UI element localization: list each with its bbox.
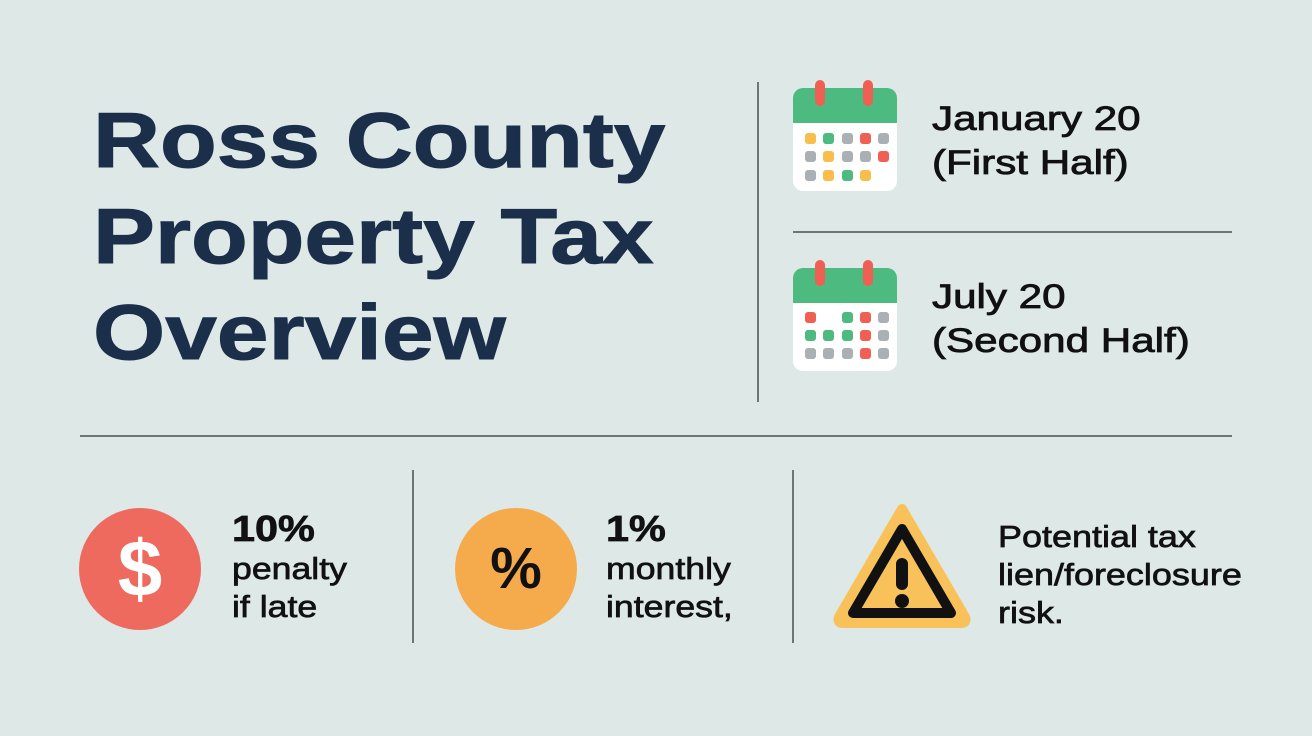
title: Overview — [93, 288, 506, 376]
icon: percent — [455, 508, 577, 630]
title: Ross County — [93, 96, 665, 184]
text: lien risk: Potential tax — [998, 519, 1196, 554]
date: first half — [932, 100, 1141, 182]
text: penalty: 10% — [232, 508, 315, 549]
date: second half: (Second Half) — [932, 322, 1190, 360]
text: interest: interest, — [606, 589, 733, 624]
date: first half: (First Half) — [932, 144, 1129, 182]
text: penalty — [232, 508, 348, 624]
icon: warning — [834, 504, 970, 628]
icon: calendar first half — [793, 80, 897, 191]
icon: percent: % — [490, 536, 542, 601]
text: interest: monthly — [606, 551, 731, 586]
icon: calendar second half — [793, 260, 897, 371]
text: penalty: penalty — [232, 551, 347, 586]
icon: dollar — [79, 508, 201, 630]
date: second half: July 20 — [932, 278, 1066, 316]
text: interest: 1% — [606, 508, 666, 549]
date: second half — [932, 278, 1190, 360]
title — [93, 96, 666, 376]
text: lien risk: lien/foreclosure — [998, 557, 1242, 592]
text: lien risk — [998, 519, 1242, 630]
icon: dollar: $ — [118, 524, 162, 613]
text: penalty: if late — [232, 589, 317, 624]
date: first half: January 20 — [932, 100, 1141, 138]
text: interest — [606, 508, 733, 624]
title: Property Tax — [93, 192, 654, 280]
text: lien risk: risk. — [998, 595, 1064, 630]
